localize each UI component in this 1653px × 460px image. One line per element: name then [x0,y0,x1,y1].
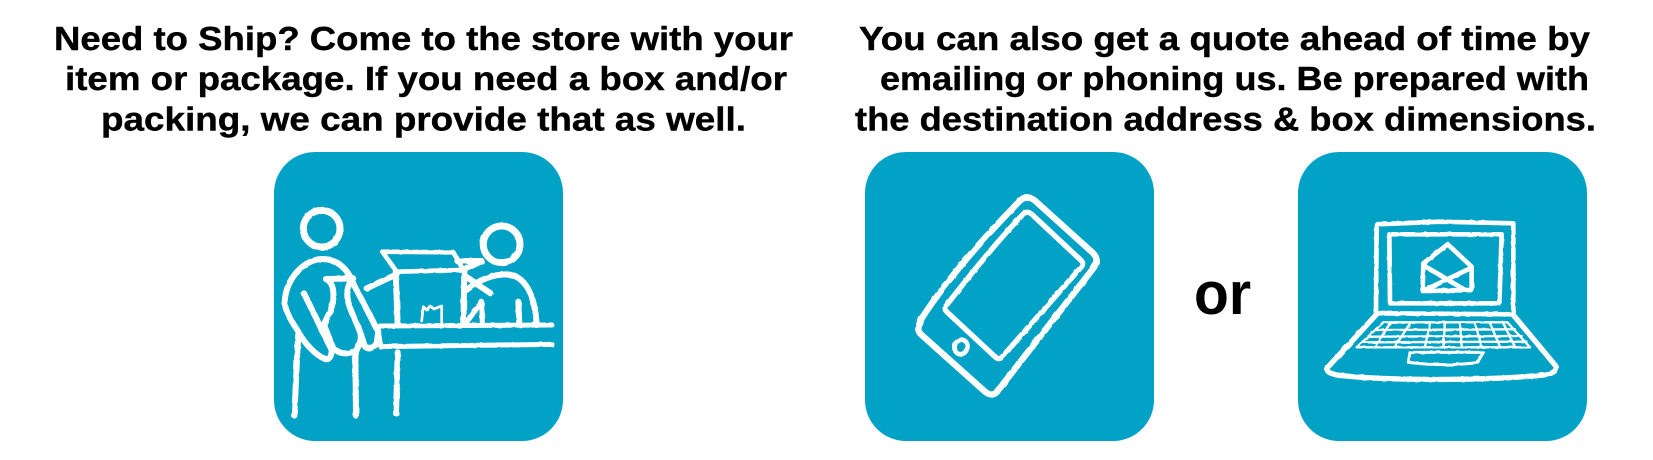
heading: need to ship: item or package. If you need a box and/or [65,60,787,97]
icon: smartphone [918,197,1096,394]
heading: need to ship: Need to Ship? Come to the store with your [54,20,793,57]
heading: get a quote: emailing or phoning us. Be prepared with [880,60,1589,97]
heading: get a quote: the destination address & box dimensions. [855,100,1596,138]
icon: laptop with envelope [1327,222,1556,379]
panel: laptop [1298,152,1587,441]
heading: need to ship: packing, we can provide that as well. [101,100,746,138]
panel: store counter [274,152,563,441]
panel: phone [865,152,1154,441]
icon: two people at counter with box [285,210,552,416]
heading: get a quote: You can also get a quote ahead of time by [859,20,1591,57]
text: or: or [1194,260,1251,327]
heading: need to ship [54,20,793,138]
heading: get a quote [855,20,1596,138]
